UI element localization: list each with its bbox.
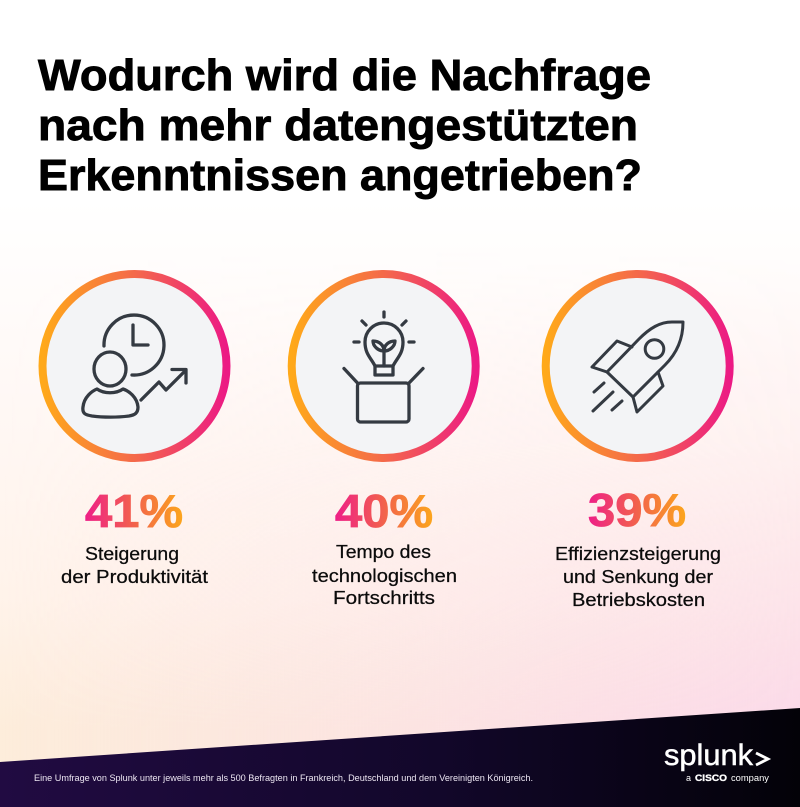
icon: light bulb rising from box <box>292 274 476 458</box>
label: Tempo des technologischen Fortschritts: Fortschritts <box>333 587 435 608</box>
logo: splunk a Cisco company: CISCO <box>695 773 727 783</box>
label: Steigerung der Produktivität: Steigerung <box>85 543 179 564</box>
label: Tempo des technologischen Fortschritts <box>312 541 457 608</box>
title <box>38 51 651 200</box>
label: Effizienzsteigerung und Senkung der Betriebskosten: und Senkung der <box>563 566 713 587</box>
title: Erkenntnissen angetrieben? <box>38 151 642 200</box>
label: Tempo des technologischen Fortschritts: technologischen <box>312 565 457 586</box>
percentage: 39%: 39% <box>588 484 686 536</box>
percentage: 41%: 41% <box>85 485 183 537</box>
panel: Tempo des technologischen Fortschritts <box>292 274 476 608</box>
panel: Effizienzsteigerung und Senkung der Betriebskosten <box>546 274 730 610</box>
icon: person, clock and rising arrow <box>42 274 226 458</box>
footnote: Eine Umfrage von Splunk unter jeweils mehr als 500 Befragten in Frankreich, Deutschland und dem Vereinigten Königreich. <box>34 773 533 783</box>
label: Tempo des technologischen Fortschritts: Tempo des <box>336 541 431 562</box>
percentage: 40%: 40% <box>335 485 433 537</box>
icon: rocket <box>546 274 730 458</box>
label: Effizienzsteigerung und Senkung der Betriebskosten: Effizienzsteigerung <box>555 543 721 564</box>
title: Wodurch wird die Nachfrage <box>38 51 651 100</box>
label: Steigerung der Produktivität: der Produktivität <box>61 566 208 587</box>
label: Steigerung der Produktivität <box>61 543 208 587</box>
logo: splunk a Cisco company: splunk <box>664 739 754 772</box>
title: nach mehr datengestützten <box>38 101 638 150</box>
label: Effizienzsteigerung und Senkung der Betriebskosten: Betriebskosten <box>572 589 705 610</box>
panel: Steigerung der Produktivität <box>42 274 226 587</box>
logo: splunk a Cisco company <box>664 739 770 783</box>
label: Effizienzsteigerung und Senkung der Betriebskosten <box>555 543 721 610</box>
logo: splunk a Cisco company: company <box>731 773 770 783</box>
logo: splunk a Cisco company: a <box>686 773 691 783</box>
footer band <box>0 708 800 807</box>
